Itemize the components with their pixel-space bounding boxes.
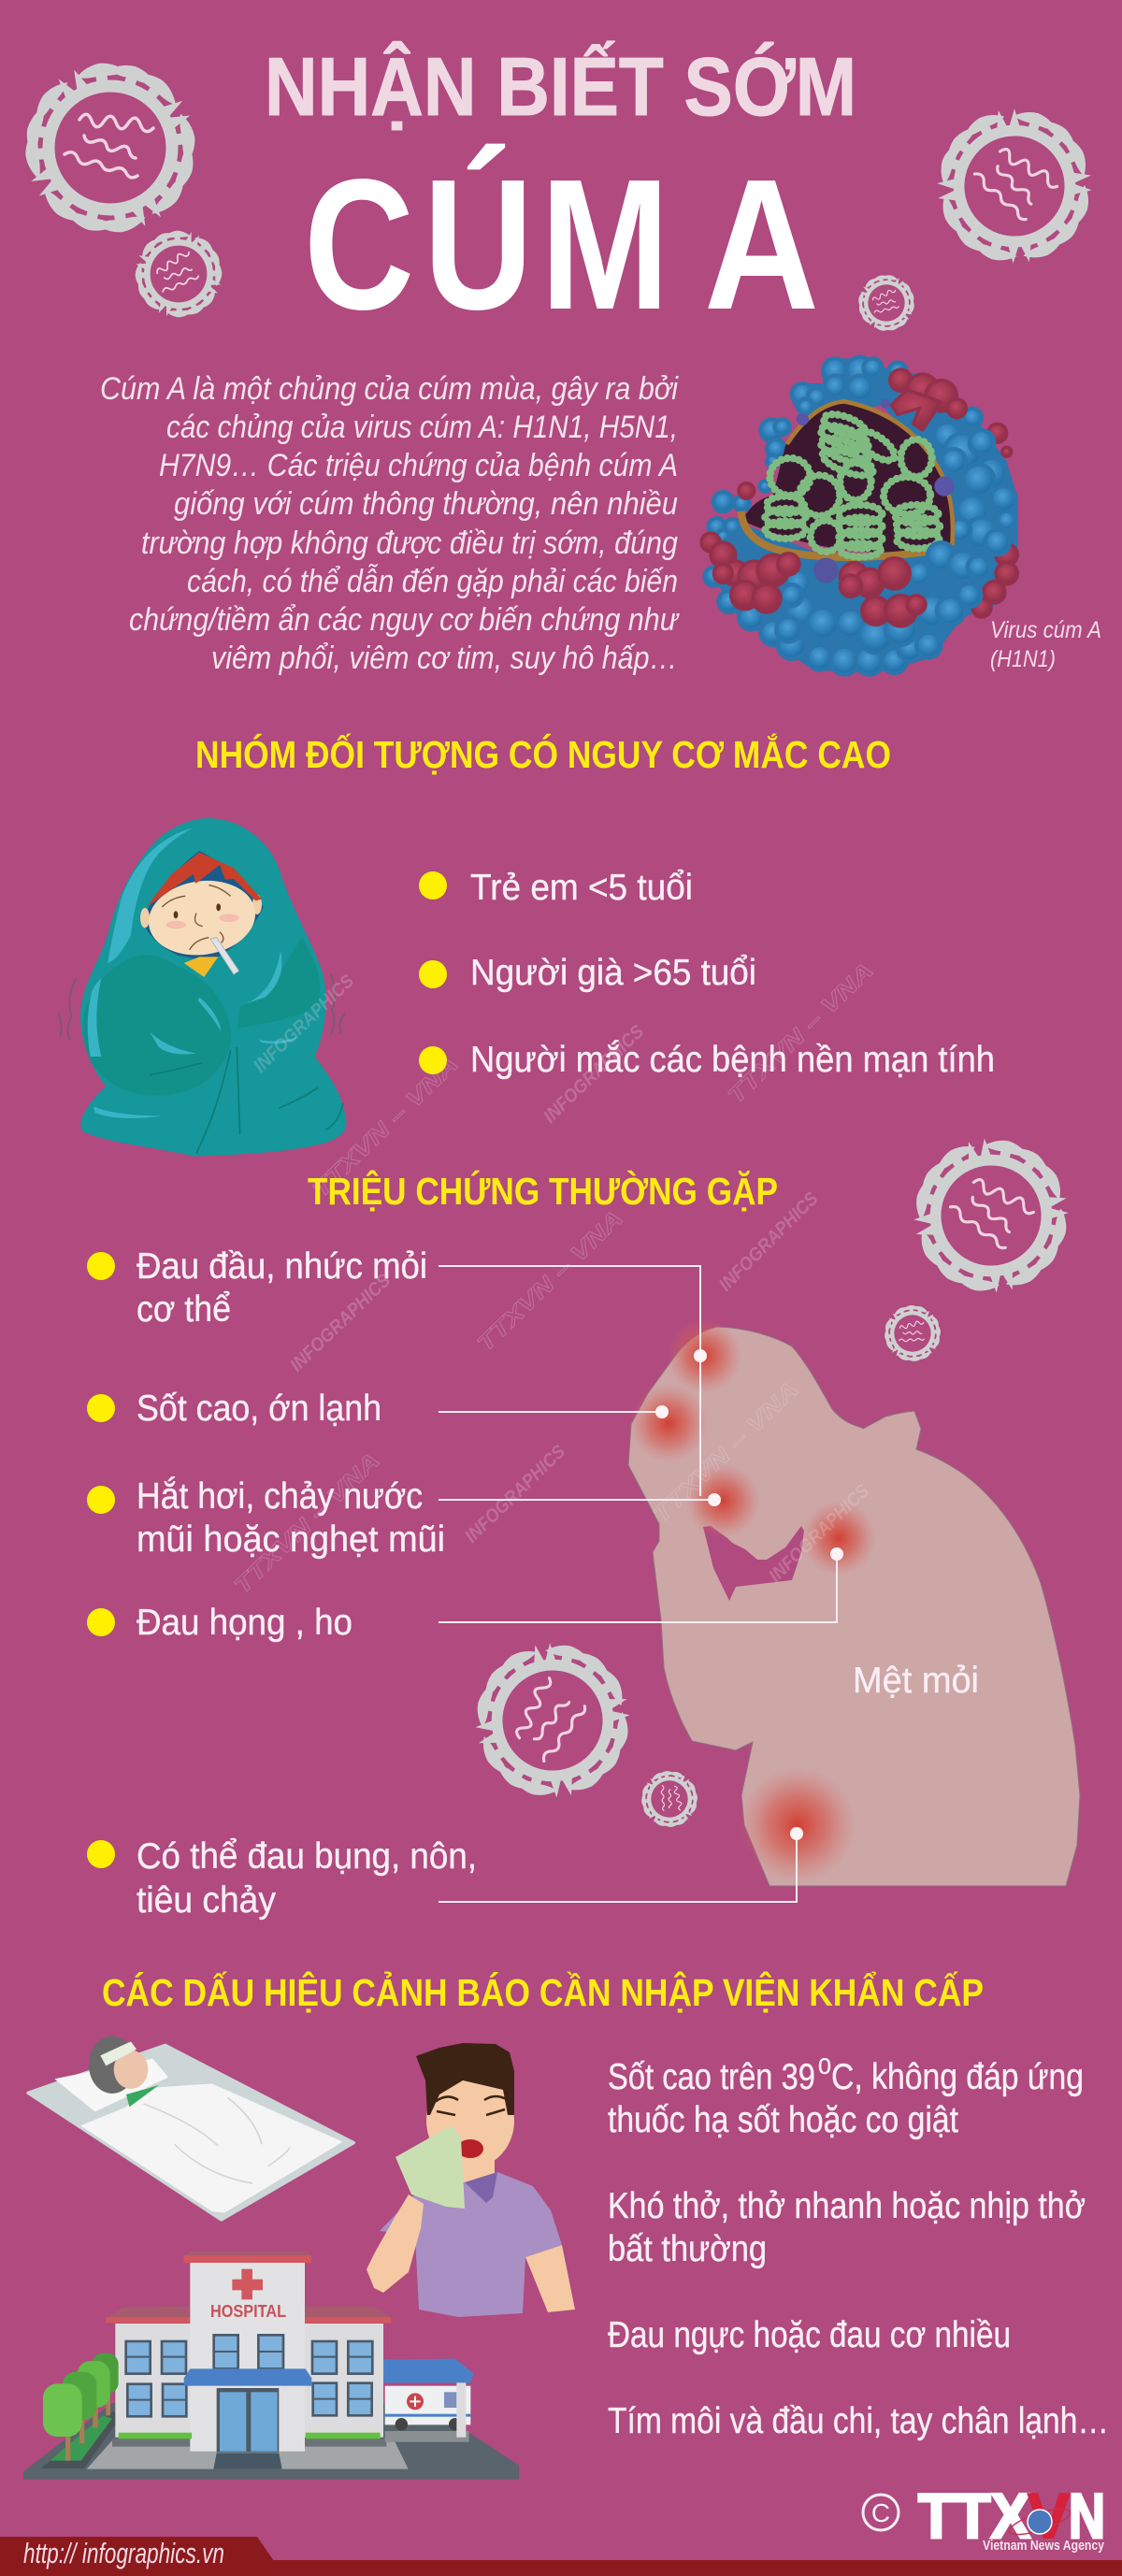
heading: risk groups: NHÓM ĐỐI TƯỢNG CÓ NGUY CƠ MẮC CAO <box>195 733 891 776</box>
list: risk groups: Người già >65 tuổi <box>470 953 756 993</box>
list: warning signs: bất thường <box>608 2229 767 2269</box>
title: line 2: C <box>304 141 414 349</box>
watermarks: INFOGRAPHICS <box>539 1021 649 1128</box>
list: symptoms: tiêu chảy <box>137 1880 276 1921</box>
icon: virus top right small <box>846 263 927 343</box>
list: risk groups: Trẻ em <5 tuổi <box>470 868 693 908</box>
list: symptoms: Hắt hơi, chảy nước <box>137 1476 423 1517</box>
title: line 1: NHẬN BIẾT SỚM <box>265 40 856 133</box>
list: warning signs: C, không đáp ứng <box>831 2057 1084 2097</box>
illustration: H1N1 virus model <box>701 357 1017 675</box>
logo: TTXVN: C <box>871 2498 890 2527</box>
list: warning signs: Đau ngực hoặc đau cơ nhiều <box>608 2315 1011 2355</box>
list: symptoms <box>87 1246 477 1921</box>
list: symptoms: Sốt cao, ớn lạnh <box>137 1389 381 1429</box>
intro paragraph: viêm phổi, viêm cơ tim, suy hô hấp… <box>211 640 678 676</box>
title: line 2: M <box>540 141 669 349</box>
list: symptoms: Có thể đau bụng, nôn, <box>137 1836 477 1877</box>
logo: TTXVN: N <box>1069 2481 1105 2552</box>
intro paragraph: H7N9… Các triệu chứng của bệnh cúm A <box>159 448 678 483</box>
list: warning signs: 0 <box>818 2054 831 2080</box>
list: symptoms: Đau họng , ho <box>137 1603 352 1643</box>
intro paragraph <box>100 371 680 676</box>
watermarks: INFOGRAPHICS <box>461 1441 570 1547</box>
icon: virus top left small <box>115 210 242 338</box>
list: warning signs: Sốt cao trên 39 <box>608 2057 815 2097</box>
title: line 2: A <box>704 141 819 349</box>
logo: TTXVN: TTX <box>918 2481 1030 2552</box>
illustration: person silhouette <box>628 1318 1080 1886</box>
heading: symptoms: TRIỆU CHỨNG THƯỜNG GẶP <box>308 1170 778 1213</box>
watermarks: TTXVN – VNA <box>648 1376 804 1528</box>
watermarks: INFOGRAPHICS <box>715 1188 823 1296</box>
watermarks: INFOGRAPHICS <box>765 1480 874 1587</box>
illustration: sneezing man <box>367 2043 575 2317</box>
caption: virus <box>990 617 1101 672</box>
logo: TTXVN <box>863 2481 1105 2554</box>
icon: virus top right large <box>909 80 1121 292</box>
intro paragraph: Cúm A là một chủng của cúm mùa, gây ra bởi <box>100 371 679 407</box>
title: line 2 <box>304 141 819 349</box>
illustration: patient in bed <box>28 2036 353 2220</box>
watermarks: TTXVN – VNA <box>308 1051 464 1202</box>
icon: virus symptoms right large <box>889 1114 1093 1317</box>
caption: virus: (H1N1) <box>990 646 1056 672</box>
caption: virus: Virus cúm A <box>990 617 1101 643</box>
intro paragraph: trường hợp không được điều trị sớm, đúng <box>141 525 678 561</box>
watermarks: INFOGRAPHICS <box>286 1270 396 1376</box>
icon: virus symptoms right small <box>875 1296 950 1371</box>
illustration: sick child in blanket <box>58 818 347 1157</box>
list: risk groups: Người mắc các bệnh nền mạn tính <box>470 1040 995 1080</box>
footer bar <box>0 2537 1122 2576</box>
watermarks: TTXVN – VNA <box>723 957 879 1109</box>
footer bar: http:// infographics.vn <box>23 2537 224 2569</box>
illustration: hospital: HOSPITAL <box>210 2302 286 2321</box>
list: warning signs: thuốc hạ sốt hoặc co giật <box>608 2100 958 2140</box>
list: symptoms: Đau đầu, nhức mỏi <box>137 1246 427 1287</box>
watermarks: TTXVN – VNA <box>472 1205 628 1357</box>
intro paragraph: giống với cúm thông thường, nên nhiều <box>174 486 678 522</box>
list: symptoms: cơ thể <box>137 1289 231 1330</box>
watermarks: INFOGRAPHICS <box>250 971 359 1077</box>
watermarks <box>229 957 879 1599</box>
callout lines <box>439 1266 837 1902</box>
icon: virus symptoms center large <box>451 1619 654 1822</box>
list: symptoms: mũi hoặc nghẹt mũi <box>137 1519 445 1560</box>
icon: virus symptoms center small <box>632 1762 707 1836</box>
intro paragraph: các chủng của virus cúm A: H1N1, H5N1, <box>166 410 678 445</box>
illustration: hospital <box>23 2251 519 2480</box>
watermarks: TTXVN – VNA <box>229 1447 385 1599</box>
icon: virus top left large <box>22 59 199 237</box>
heading: warning signs: CÁC DẤU HIỆU CẢNH BÁO CẦN NHẬP VIỆN KHẨN CẤP <box>102 1970 984 2014</box>
intro paragraph: chứng/tiềm ẩn các nguy cơ biến chứng như <box>129 602 680 638</box>
label: fatigue: Mệt mỏi <box>853 1661 979 1701</box>
callout dots <box>655 1349 843 1840</box>
title: line 2: Ú <box>424 141 533 349</box>
intro paragraph: cách, có thể dẫn đến gặp phải các biến <box>187 564 678 599</box>
logo: TTXVN: V <box>1028 2481 1070 2552</box>
list: warning signs <box>608 2054 1109 2441</box>
list: risk groups <box>419 868 995 1080</box>
